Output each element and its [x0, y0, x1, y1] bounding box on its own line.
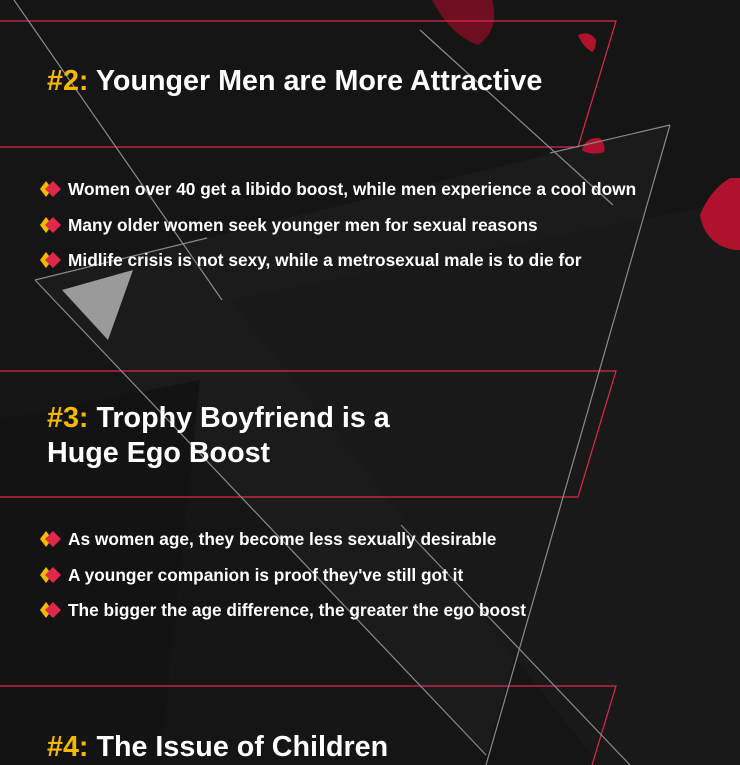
petals	[432, 0, 494, 45]
bullet 1: Women over 40 get a libido boost, while men experience a cool down	[68, 179, 636, 199]
title #4: #4: The Issue of Children	[47, 731, 388, 763]
list: section 2 bullets	[40, 179, 636, 270]
title #2: #2: Younger Men are More Attractive	[47, 65, 542, 97]
bullet 2: A younger companion is proof they've still got it	[68, 564, 463, 584]
bullet 3: The bigger the age difference, the greater the ego boost	[68, 600, 526, 620]
bullet 3: Midlife crisis is not sexy, while a metrosexual male is to die for	[68, 250, 582, 270]
bullet 1: As women age, they become less sexually desirable	[68, 529, 496, 549]
title #3: #3: Trophy Boyfriend is a	[47, 402, 390, 434]
frames	[0, 21, 616, 147]
bullet 2: Many older women seek younger men for sexual reasons	[68, 214, 538, 234]
title #3	[47, 402, 390, 469]
list: section 3 bullets	[40, 529, 526, 620]
title #3: Huge Ego Boost	[47, 437, 270, 469]
